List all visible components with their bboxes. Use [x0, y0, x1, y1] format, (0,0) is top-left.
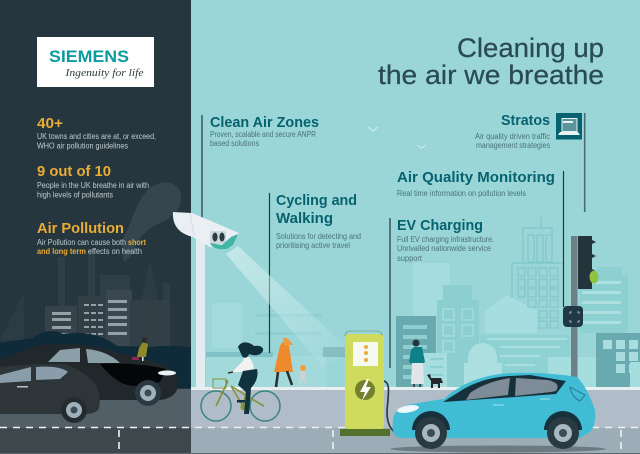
- stat: 9 out of 10: 9 out of 10: [37, 164, 111, 180]
- left dark panel: [0, 0, 191, 454]
- label: Stratos: management strategies: [476, 141, 550, 150]
- stat: 9 out of 10: high levels of pollutants: [37, 190, 113, 200]
- dark city silhouette: [0, 182, 181, 350]
- woman with dog: [409, 340, 443, 388]
- label: Clean Air Zones: Proven, scalable and secure ANPR: [210, 130, 316, 139]
- label: Stratos: Stratos: [501, 113, 550, 129]
- label: Air Quality Monitoring: Air Quality Monitoring: [397, 170, 555, 186]
- background: teal sky: [191, 0, 640, 454]
- camera on pole with light beam: [173, 212, 352, 388]
- small chevrons: [368, 127, 426, 148]
- label: Cycling and Walking: [276, 193, 361, 250]
- label: EV Charging: Full EV charging infrastructure.: [397, 235, 494, 244]
- label: Clean Air Zones: Clean Air Zones: [210, 115, 319, 131]
- person sitting on car: [132, 337, 148, 361]
- label: Cycling and Walking: Cycling and: [276, 193, 357, 209]
- road left side: [0, 389, 191, 428]
- stat: 40+: [37, 116, 156, 150]
- label: Clean Air Zones: based solutions: [210, 139, 259, 148]
- stat: Air Pollution: Air Pollution: [37, 221, 124, 237]
- label: Air Quality Monitoring: [397, 170, 555, 198]
- label: EV Charging: support: [397, 254, 423, 263]
- walking woman and child: [274, 338, 307, 387]
- label: Cycling and Walking: Walking: [276, 211, 333, 227]
- road right side: [191, 390, 640, 428]
- stat: 40+: UK towns and cities are at, or exceed,: [37, 132, 156, 141]
- connector lines: [202, 113, 585, 368]
- label: Air Quality Monitoring: Real time information on pollution levels: [397, 189, 526, 198]
- dark parked cars group: [0, 331, 191, 423]
- stat: Air Pollution: and long term effects on health: [37, 247, 142, 256]
- sensor box on pole: [563, 306, 583, 327]
- stat: 9 out of 10: People in the UK breathe in air with: [37, 181, 149, 190]
- label: Stratos: [475, 113, 550, 150]
- label: Cycling and Walking: prioritising active travel: [276, 241, 350, 250]
- stat: Air Pollution: Air Pollution can cause both short: [37, 238, 146, 247]
- stat: Air Pollution: [37, 221, 146, 256]
- label: Stratos: Air quality driven traffic: [475, 132, 550, 141]
- electric car: [390, 373, 606, 452]
- title: [378, 33, 604, 90]
- stat: 9 out of 10: [37, 164, 149, 200]
- bottom edge line: [0, 453, 640, 454]
- teal city skyline: [206, 217, 640, 388]
- road centre dashes: [0, 426, 640, 428]
- icon: laptop: [556, 113, 582, 140]
- stat: 40+: 40+: [37, 116, 63, 132]
- EV charger: [340, 331, 420, 436]
- stat: 40+: WHO air pollution guidelines: [37, 142, 128, 150]
- logo: Siemens: [37, 37, 154, 87]
- label: EV Charging: Unrivalled nationwide service: [397, 244, 492, 253]
- label: EV Charging: [397, 218, 494, 263]
- cyclist: [201, 342, 280, 421]
- label: Cycling and Walking: Solutions for detecting and: [276, 232, 361, 241]
- label: EV Charging: EV Charging: [397, 218, 483, 234]
- logo: Siemens: SIEMENS: [49, 47, 129, 66]
- label: Clean Air Zones: [210, 115, 319, 148]
- logo: Siemens: Ingenuity for life: [64, 67, 144, 79]
- title: the air we breathe: [378, 60, 604, 90]
- title: Cleaning up: [457, 33, 604, 63]
- traffic light: [571, 236, 598, 381]
